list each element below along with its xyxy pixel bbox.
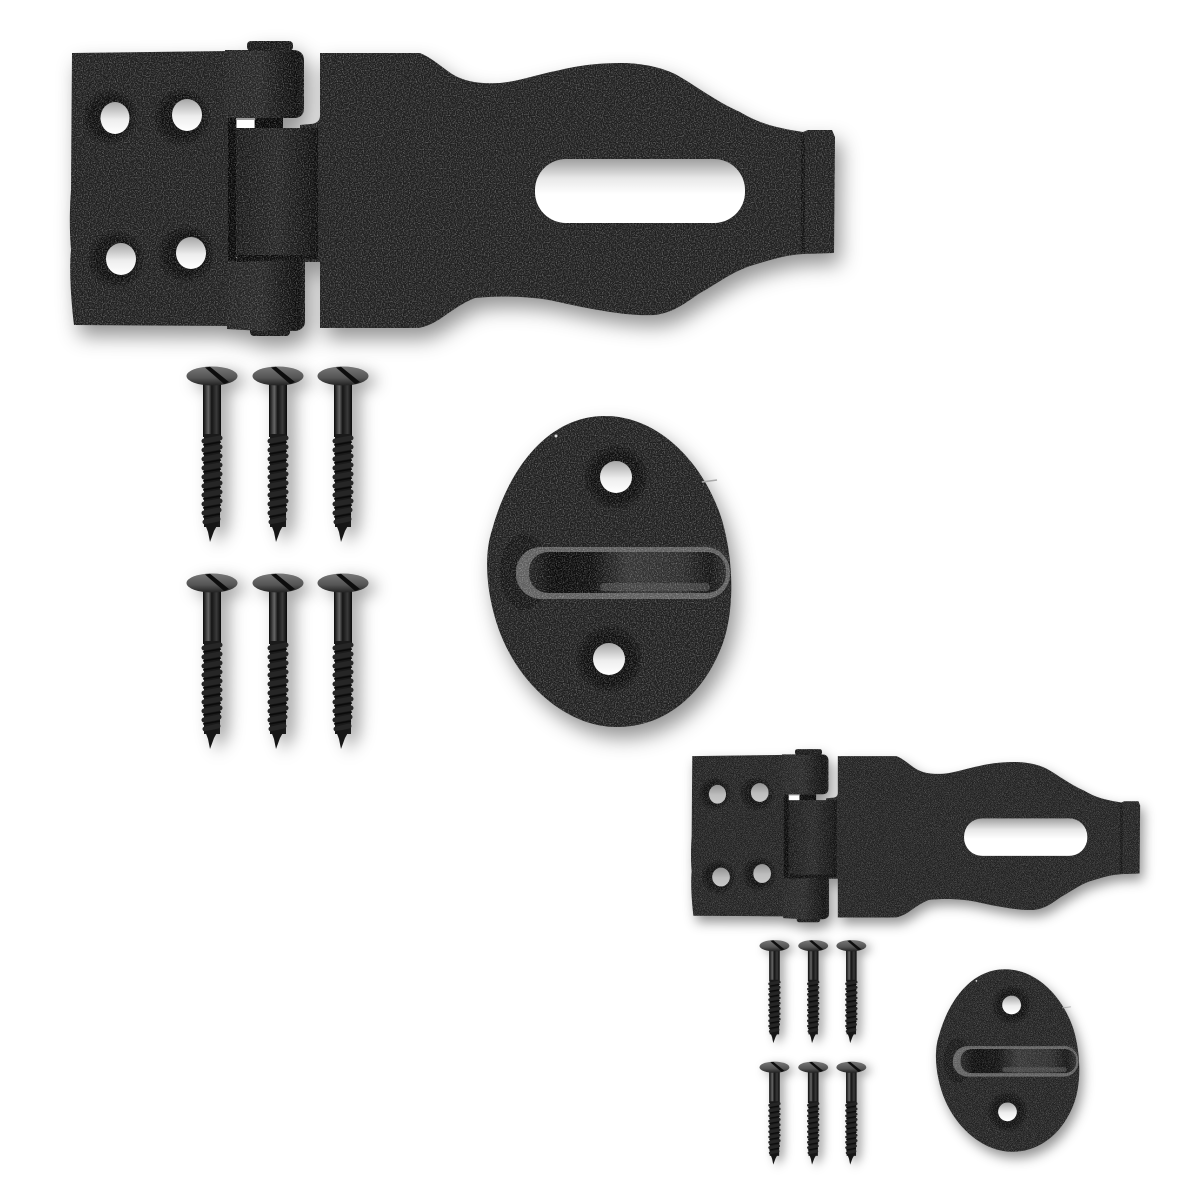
small screw set (759, 940, 866, 1165)
small oval staple catch (936, 969, 1079, 1152)
large hasp plate (70, 41, 835, 336)
small hasp plate (691, 749, 1140, 922)
large screw set (186, 366, 368, 749)
large oval staple catch (487, 416, 731, 727)
